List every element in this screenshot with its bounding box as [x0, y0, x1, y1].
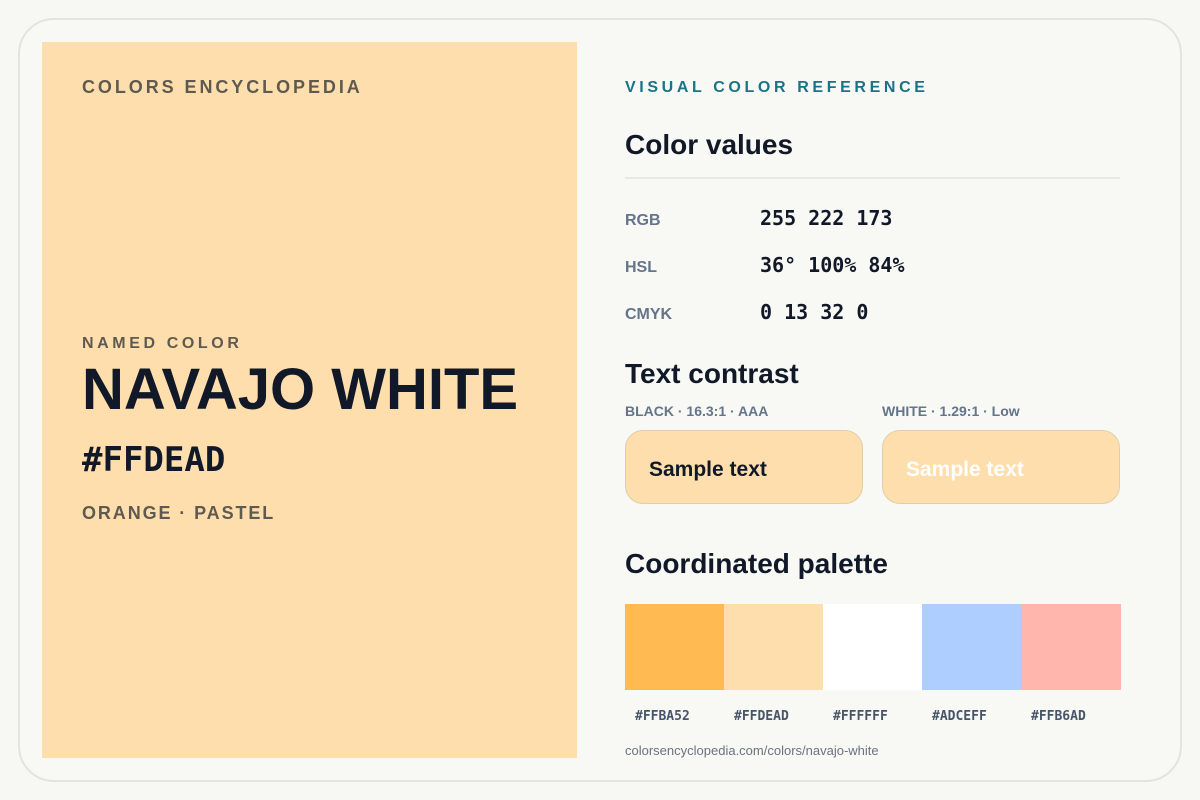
sample: black text: [625, 430, 863, 504]
palette hex labels: #FFDEAD: [734, 709, 789, 724]
palette hex labels: #FFB6AD: [1031, 709, 1086, 724]
caption: black contrast: BLACK · 16.3:1 · AAA: [625, 403, 768, 419]
palette hex labels: #FFBA52: [635, 709, 690, 724]
caption: white contrast: WHITE · 1.29:1 · Low: [882, 403, 1020, 419]
sample: black text: Sample text: [649, 458, 767, 481]
palette hex labels: #FFFFFF: [833, 709, 888, 724]
brand label: COLORS ENCYCLOPEDIA: [82, 77, 363, 97]
row: CMYK: CMYK: [625, 306, 672, 323]
palette hex labels: #ADCEFF: [932, 709, 987, 724]
row: RGB: RGB: [625, 212, 661, 229]
palette hex labels: [635, 709, 1086, 724]
sample: white text: Sample text: [906, 458, 1024, 481]
color family tags: ORANGE · PASTEL: [82, 503, 275, 523]
row: RGB: [625, 206, 892, 230]
heading: text contrast: Text contrast: [625, 358, 799, 389]
row: CMYK: 0 13 32 0: [760, 300, 868, 324]
row: RGB: 255 222 173: [760, 206, 892, 230]
section label: VISUAL COLOR REFERENCE: [625, 79, 929, 96]
panel: color swatch hero: [42, 42, 577, 758]
hex code: #FFDEAD: [82, 440, 225, 480]
heading: coordinated palette: Coordinated palette: [625, 548, 888, 579]
panel: color values: [625, 129, 1120, 324]
row: HSL: HSL: [625, 259, 657, 276]
heading: color values: Color values: [625, 129, 793, 160]
divider: [625, 177, 1120, 179]
row: CMYK: [625, 300, 868, 324]
source url: colorsencyclopedia.com/colors/navajo-white: [625, 743, 879, 758]
row: HSL: [625, 253, 904, 277]
row: HSL: 36° 100% 84%: [760, 253, 904, 277]
sample: white text: [882, 430, 1120, 504]
palette swatches: [625, 604, 1121, 690]
kicker: named color: NAMED COLOR: [82, 335, 242, 352]
title: color name: NAVAJO WHITE: [82, 357, 518, 422]
